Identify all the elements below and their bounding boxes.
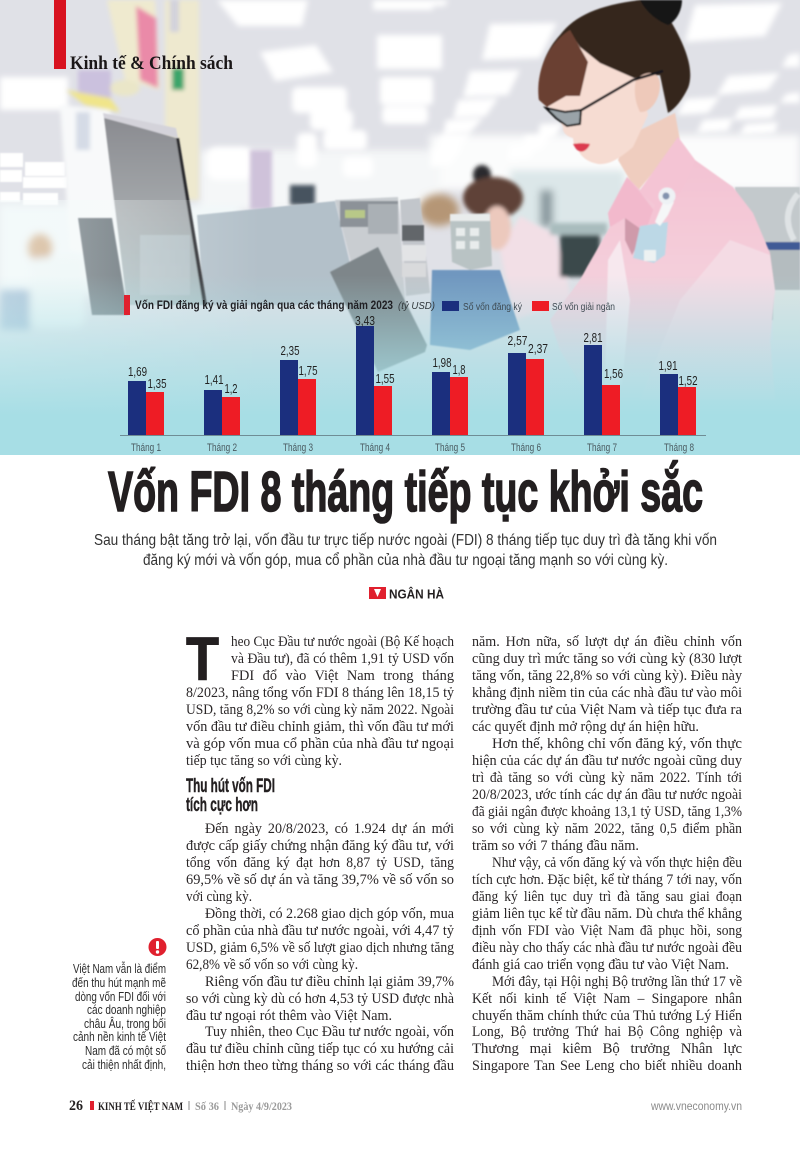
icon: exclamation mark (148, 938, 166, 956)
value labels: 1,41 (204, 372, 224, 387)
intro paragraph: và Đầu tư), đã có thêm 1,91 tỷ USD vốn (231, 651, 455, 667)
month labels: Tháng 1 (131, 442, 161, 454)
teal fade (0, 200, 260, 455)
month labels: Tháng 3 (283, 442, 313, 454)
subheading (186, 776, 275, 816)
glasses (578, 71, 663, 112)
article column 2: cũng duy trì mức tăng so với cùng kỳ (830 lượt (472, 651, 742, 667)
month labels: Tháng 2 (207, 442, 237, 454)
page footer: www.vneconomy.vn (650, 1099, 742, 1113)
subheading: tích cực hơn (186, 795, 258, 816)
value labels: 2,81 (584, 330, 602, 345)
body paragraphs: cổ phần của nhà đầu tư nước ngoài, với 4,47 tỷ (186, 923, 455, 939)
value labels: 3,43 (355, 313, 375, 328)
legend: Số vốn đăng ký (463, 301, 523, 313)
article column 2: chuyến thăm chính thức của Thủ tướng Lý Hiển (472, 1008, 743, 1024)
month labels: Tháng 7 (587, 442, 617, 454)
callout text: dòng vốn FDI đối với (75, 990, 166, 1004)
chart title: (tỷ USD) (398, 300, 435, 312)
face (548, 40, 648, 164)
article column 2: trường đầu tư của Việt Nam và tiếp tục đưa ra (472, 702, 743, 718)
callout text (72, 961, 166, 1072)
callout text: Nam đã có một số (85, 1044, 166, 1058)
legend (442, 301, 615, 313)
body paragraphs: đầu tư điều chỉnh cũng tiếp tục có xu hướng cải (186, 1041, 454, 1057)
value labels: 1,69 (128, 364, 147, 379)
body paragraphs: 62,8% về số vốn so với cùng kỳ. (186, 957, 358, 973)
sidebar callout (72, 938, 166, 1072)
value labels (128, 313, 698, 396)
month labels: Tháng 5 (435, 442, 465, 454)
body paragraphs: Đến ngày 20/8/2023, có 1.924 dự án mới (205, 821, 454, 837)
bars (120, 326, 706, 436)
body paragraphs: so với cùng kỳ dù có hơn 4,53 tỷ USD được nhà (186, 991, 454, 1007)
article column 2: Singapore Tan See Leng cho biết nhiều doanh (472, 1058, 743, 1074)
far factory background (0, 194, 459, 330)
intro paragraph: USD, tăng 8,2% so với cùng kỳ năm 2022. Ngoài (186, 702, 454, 718)
monitor (78, 113, 207, 315)
byline (369, 586, 444, 602)
hair (539, 0, 690, 113)
article column 2 (472, 634, 743, 1074)
chart title (124, 295, 435, 315)
chart title: Vốn FDI đăng ký và giải ngân qua các tháng năm 2023 (135, 300, 393, 312)
month labels: Tháng 6 (511, 442, 541, 454)
body paragraphs (186, 821, 455, 1074)
article column 2: Long, Bộ trưởng Thứ hai Bộ Công nghiệp và (472, 1024, 742, 1040)
body paragraphs: tổng vốn đăng ký đạt hơn 8,87 tỷ USD, tăng (186, 855, 455, 871)
byline: NGÂN HÀ (389, 586, 444, 602)
page footer: 26 (69, 1098, 83, 1114)
section tag (54, 0, 233, 74)
callout text: đến thu hút mạnh mẽ (72, 976, 166, 990)
body paragraphs: đầu tư ngoại rót thêm vào Việt Nam. (186, 1008, 392, 1024)
article column 2: khẳng định niềm tin của các nhà đầu tư vào môi (472, 685, 742, 701)
body paragraphs: Tuy nhiên, theo Cục Đầu tư nước ngoài, vốn (205, 1024, 455, 1040)
callout text: cảnh nền kinh tế Việt (73, 1030, 166, 1044)
body paragraphs: thiện hơn theo từng tháng so với các tháng đầu (186, 1058, 455, 1074)
page footer: Số 36 (195, 1100, 219, 1113)
article column 2: Hơn thế, không chỉ vốn đăng ký, vốn thực (492, 736, 743, 752)
body paragraphs: Đồng thời, có 2.268 giao dịch góp vốn, mua (205, 906, 454, 922)
article column 2: các quyết định mở rộng dự án hiện hữu. (472, 719, 699, 735)
standfirst: đăng ký mới và vốn góp, mua cổ phần của nhà đầu tư ngoại tăng mạnh so với cùng kỳ. (143, 552, 668, 569)
month labels (131, 442, 694, 454)
callout text: Việt Nam vẫn là điểm (73, 961, 166, 976)
value labels: 1,8 (452, 362, 466, 377)
value labels: 1,2 (224, 381, 238, 396)
standfirst: Sau tháng bật tăng trở lại, vốn đầu tư trực tiếp nước ngoài (FDI) 8 tháng tiếp tục duy trì đà tăng khi vốn (94, 532, 717, 549)
section tag: Kinh tế & Chính sách (70, 53, 233, 74)
article column 2: Như vậy, cả vốn đăng ký và vốn thực hiện đều (492, 855, 743, 871)
article column 2: trì đà tăng so với cùng kỳ năm 2022. Tính tới (472, 770, 742, 786)
hero photo: factory worker (0, 0, 800, 455)
sorting machine (430, 187, 800, 350)
article column 2: tăng vốn, tăng 22,8% so với cùng kỳ). Điều này (472, 668, 743, 684)
body paragraphs: với cùng kỳ. (186, 889, 252, 905)
article column 2: tích cực hơn. Đặc biệt, kể từ tháng 7 tới nay, vốn (472, 872, 743, 888)
printer plate (330, 247, 427, 372)
main worker (538, 0, 775, 400)
intro paragraph: tiếp tục tăng so với cùng kỳ. (186, 753, 342, 769)
body paragraphs: 69,5% về số dự án và tăng 39,7% về số vốn so (186, 872, 454, 888)
article column 2: đăng ký liên tục duy trì đà tăng sau giai đoạn (472, 889, 743, 905)
month labels: Tháng 4 (360, 442, 390, 454)
body paragraphs: được cấp giấy chứng nhận đăng ký đầu tư, với (186, 838, 454, 854)
article column 2: định vốn FDI vào Việt Nam đã phục hồi, song (472, 923, 743, 939)
article column 2: Kết nối kinh tế Việt Nam – Singapore nhân (472, 991, 743, 1007)
article column 2: trăm so với 7 tháng đầu năm. (472, 838, 639, 854)
drop cap: T (186, 625, 219, 693)
page footer: KINH TẾ VIỆT NAM (98, 1098, 183, 1113)
value labels: 2,37 (528, 341, 548, 356)
value labels: 1,35 (148, 376, 166, 391)
body paragraphs: USD, giảm 6,5% về số lượt giao dịch nhưng tăng (186, 940, 455, 956)
intro paragraph (186, 634, 455, 769)
background worker (463, 165, 607, 320)
callout text: các doanh nghiệp (87, 1003, 166, 1017)
article column 2: Mới đây, tại Hội nghị Bộ trưởng lần thứ 17 về (492, 974, 742, 990)
legend: Số vốn giải ngân (552, 301, 615, 313)
page footer: Ngày 4/9/2023 (231, 1101, 292, 1113)
value labels: 1,98 (432, 355, 452, 370)
month labels: Tháng 8 (664, 442, 694, 454)
shirt (550, 137, 775, 400)
neck (618, 113, 680, 192)
value labels: 1,75 (298, 363, 318, 378)
printer and equipment (197, 197, 430, 305)
article column 2: hiện của các dự án đầu tư nước ngoài cũng duy (472, 753, 743, 769)
article column 2: đã giải ngân được khoảng 13,1 tỷ USD, tăng 1,3% (472, 804, 742, 820)
intro paragraph: heo Cục Đầu tư nước ngoài (Bộ Kế hoạch (231, 634, 455, 650)
callout text: châu Âu, trong bối (84, 1016, 166, 1031)
article column 1 (186, 625, 455, 1074)
article column 2: năm. Hơn nữa, số lượt dự án điều chỉnh vốn (472, 634, 743, 650)
body paragraphs: Riêng vốn đầu tư điều chỉnh lại giảm 39,7% (205, 974, 454, 990)
article column 2: so với cùng kỳ năm 2022, tăng 0,5 điểm phần (472, 821, 743, 837)
value labels: 1,91 (658, 358, 678, 373)
standfirst (94, 532, 717, 569)
intro paragraph: vốn đầu tư điều chỉnh giảm, thì vốn đầu tư mới (186, 719, 454, 735)
value labels: 1,56 (604, 366, 623, 381)
article column 2: 20/8/2023, ước tính các dự án đầu tư nước ngoài (472, 787, 742, 803)
intro paragraph: và góp vốn mua cổ phần của nhà đầu tư ngoại (186, 736, 454, 752)
article column 2: Thương mại kiêm Bộ trưởng Nhân lực (472, 1041, 743, 1057)
value labels: 2,57 (508, 333, 528, 348)
article column 2: giảm liên tục kể từ đầu năm. Dù chưa thể khẳng (472, 906, 743, 922)
value labels: 1,55 (376, 371, 394, 386)
chart: FDI registered and disbursed by month (120, 295, 706, 454)
left white panel and pole (60, 0, 315, 260)
value labels: 1,52 (678, 373, 698, 388)
intro paragraph: FDI đổ vào Việt Nam trong tháng (231, 668, 455, 684)
intro paragraph: 8/2023, nâng tổng vốn FDI 8 tháng lên 18,15 tỷ (186, 685, 455, 701)
callout text: cải thiện nhất định, (82, 1058, 166, 1072)
article column 2: điều này cho thấy các nhà đầu tư nước ngoài đều (472, 940, 743, 956)
value labels: 2,35 (280, 343, 300, 358)
subheading: Thu hút vốn FDI (186, 776, 275, 797)
article column 2: đánh giá cao triển vọng đầu tư vào Việt Nam. (472, 957, 729, 973)
page footer (69, 1098, 742, 1114)
